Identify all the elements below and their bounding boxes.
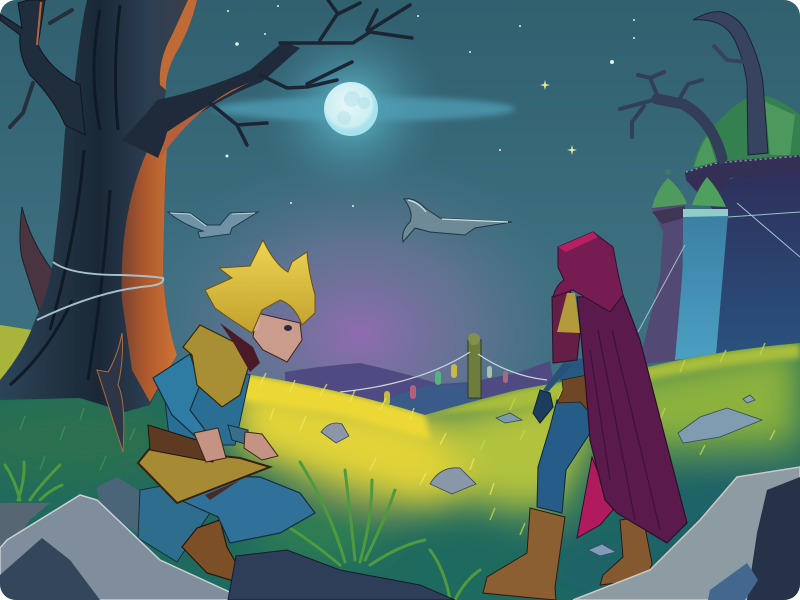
hero front leg — [180, 476, 315, 543]
figure left boot — [483, 508, 565, 600]
tree root — [97, 333, 124, 452]
moon — [324, 82, 378, 136]
figure hood — [553, 232, 623, 312]
figure cape folds — [590, 330, 660, 530]
figure arm — [543, 363, 572, 392]
flying creature right — [403, 199, 512, 242]
hero tunic fringe — [205, 467, 270, 500]
rock right foreground — [573, 467, 800, 600]
hero back leg — [138, 478, 212, 562]
hero character — [138, 240, 315, 583]
rock right blue patch — [708, 563, 758, 600]
hero boot — [182, 520, 240, 583]
figure torso — [560, 358, 590, 385]
hero ear and eye — [250, 313, 292, 331]
figure glove — [533, 390, 553, 423]
figure cape — [577, 295, 687, 543]
left yellow grass patch — [0, 325, 32, 380]
castle branch — [620, 72, 722, 158]
hero neck collar — [220, 323, 260, 372]
figure legs — [537, 400, 592, 513]
hero hair — [205, 240, 315, 333]
castle rim — [685, 155, 800, 193]
tree lit bark lower — [122, 130, 177, 402]
rock left dark inset — [0, 538, 100, 600]
tree stub — [20, 207, 54, 313]
hero far arm — [228, 425, 248, 445]
grass tufts — [5, 462, 480, 600]
tree — [0, 0, 412, 452]
stars — [226, 5, 635, 207]
figure sleeve — [552, 290, 580, 363]
hero near arm — [153, 354, 205, 436]
purple horizon glow — [176, 187, 544, 384]
castle main wall — [710, 172, 800, 354]
cables — [638, 203, 800, 332]
tree lit bark top — [160, 0, 197, 90]
tree right branches — [122, 0, 412, 158]
hero torso — [165, 355, 250, 445]
figure shoulder — [557, 293, 580, 333]
hero hands — [194, 428, 226, 462]
rock right dark inset — [747, 477, 800, 600]
central fence post and lights — [340, 333, 547, 405]
small tower — [643, 205, 685, 364]
bright top of yellow hill — [232, 372, 430, 440]
blue rock behind hero — [97, 477, 143, 535]
grass strokes — [260, 373, 494, 495]
curved spire — [693, 12, 768, 155]
hero face — [253, 313, 302, 362]
figure right boot — [600, 517, 652, 588]
tree left branches — [0, 0, 85, 135]
hooded figure — [483, 232, 687, 600]
foreground rocks — [0, 467, 800, 600]
figure belt — [557, 375, 590, 413]
bright top of right hill — [425, 343, 800, 415]
castle large dome — [693, 96, 800, 168]
hero hood cape — [183, 325, 250, 407]
figure pink cape lining — [577, 457, 613, 538]
hero tunic — [138, 448, 270, 503]
ground base — [0, 340, 800, 600]
hero belt — [148, 425, 213, 462]
soft hill colours — [0, 340, 800, 600]
distant mountains — [285, 361, 552, 402]
waterfall tower — [675, 213, 728, 360]
flying creature left — [168, 212, 258, 238]
castle — [620, 12, 800, 364]
glowing rope on tree — [37, 262, 163, 320]
rock left foreground — [0, 495, 247, 600]
rock center dark — [228, 550, 455, 600]
moon glow — [280, 36, 422, 178]
tree trunk — [0, 0, 197, 412]
rock left back — [0, 503, 50, 560]
tree bark lines — [10, 5, 120, 385]
rocks on hill — [321, 395, 762, 556]
moon streak cloud — [215, 97, 515, 121]
